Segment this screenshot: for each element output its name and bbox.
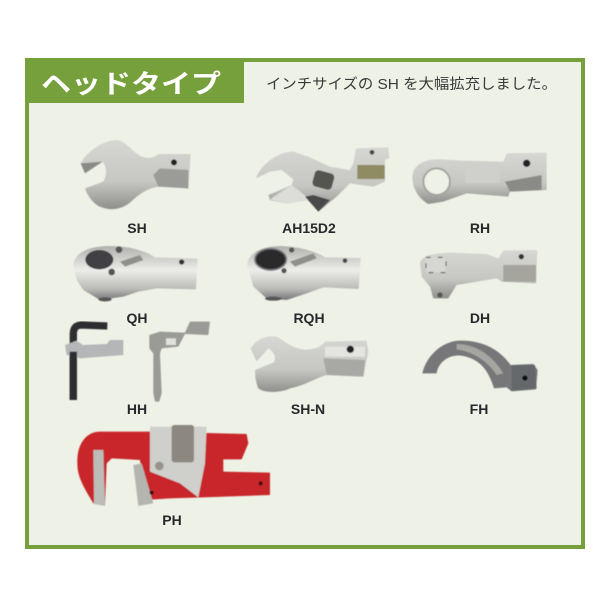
text block: subtitle: インチサイズの SH を大幅拡充しました。 [266, 76, 557, 93]
panel: head types frame [27, 60, 583, 547]
label: RH: RH [470, 220, 490, 236]
label: SH: SH [127, 220, 147, 236]
icon: AH15D2 adjustable wrench [256, 147, 389, 212]
icon: FH hook spanner [422, 341, 538, 391]
heading: head type [25, 59, 244, 103]
label: FH: FH [470, 401, 488, 417]
icon: HH hex key head [65, 325, 123, 400]
heading: head type: ヘッドタイプ [41, 69, 221, 99]
label: DH: DH [470, 310, 490, 326]
label: SH-N: SH-N [291, 401, 325, 417]
icon: RH ring wrench [412, 153, 547, 204]
icon: PH pipe wrench [77, 425, 270, 506]
icon: SH wrench [81, 140, 191, 209]
icon: SH-N flare nut wrench [251, 336, 368, 392]
label: HH: HH [127, 401, 147, 417]
icon: QH ratchet head [73, 246, 198, 301]
label: QH: QH [126, 310, 148, 326]
icon: RQH ratchet head [247, 246, 361, 301]
label: RQH: RQH [293, 310, 325, 326]
label: AH15D2: AH15D2 [282, 220, 336, 236]
label: PH: PH [162, 512, 182, 528]
icon: DH head [420, 250, 537, 298]
icon: HH angled bolt tool [149, 322, 210, 402]
